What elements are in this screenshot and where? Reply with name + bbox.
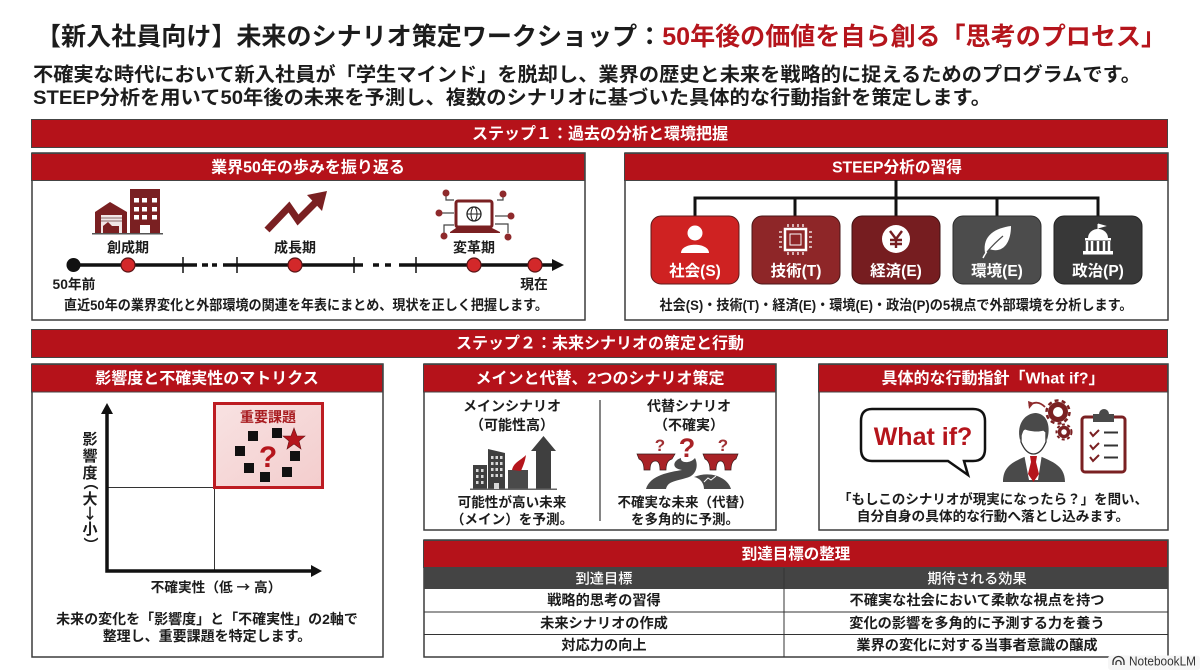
panel header: STEEP: STEEP分析の習得	[832, 158, 962, 176]
panel: two scenarios	[424, 364, 776, 530]
card: economy: 経済(E)	[870, 262, 922, 280]
panel header: history	[32, 154, 584, 180]
panel header: goals: 到達目標の整理	[742, 544, 851, 563]
panel header: goals	[424, 540, 1168, 568]
y axis label: 影	[82, 430, 98, 448]
NotebookLM watermark: NotebookLM	[1129, 654, 1196, 668]
main scenario caption	[451, 494, 573, 527]
main scenario heading	[463, 398, 561, 433]
table row 1: 不確実な社会において柔軟な視点を持つ	[850, 592, 1104, 609]
table row 1: 戦略的思考の習得	[547, 592, 661, 609]
card: society	[651, 216, 739, 284]
speech bubble	[861, 409, 985, 475]
y axis label: ）	[82, 537, 98, 552]
table row 3: 業界の変化に対する当事者意識の醸成	[856, 637, 1098, 654]
table row 3	[561, 637, 1098, 654]
matrix axes	[101, 403, 322, 577]
icon: clipboard checklist	[1082, 409, 1125, 472]
alternative scenario heading	[647, 398, 731, 433]
matrix caption: 整理し、重要課題を特定します。	[103, 628, 311, 644]
alternative scenario heading: （不確実）	[654, 417, 724, 433]
timeline labels: 現在	[520, 276, 548, 292]
card: politics: 政治(P)	[1072, 261, 1124, 280]
card: economy	[852, 216, 940, 284]
history caption: 直近50年の業界変化と外部環境の関連を年表にまとめ、現状を正しく把握します。	[64, 297, 548, 313]
timeline	[66, 257, 564, 273]
timeline labels: 創成期	[107, 240, 149, 256]
divider	[599, 400, 601, 521]
highlighted quadrant: key issues	[214, 404, 322, 488]
icon: broken bridges and forked road	[637, 433, 738, 489]
matrix caption	[56, 611, 358, 644]
alternative scenario caption	[618, 494, 752, 527]
step 1 banner: ステップ１：過去の分析と環境把握	[472, 124, 728, 143]
main scenario heading: メインシナリオ	[463, 398, 561, 414]
card: politics	[1054, 216, 1142, 284]
timeline labels: 成長期	[274, 240, 316, 256]
table header row: 到達目標	[576, 572, 632, 588]
main scenario caption: （メイン）を予測。	[451, 511, 573, 527]
table row 2	[540, 615, 1105, 632]
icon: curved arrow and gears	[1028, 400, 1072, 440]
table header row: 期待される効果	[927, 572, 1027, 588]
y axis label: 小	[82, 521, 98, 538]
panel header: matrix	[32, 364, 382, 392]
panel header: scenarios	[424, 364, 776, 392]
highlighted quadrant: key issues: 重要課題	[240, 409, 296, 425]
table row 2: 変化の影響を多角的に予測する力を養う	[849, 615, 1105, 632]
table grid lines	[424, 568, 1168, 657]
panel header: what if: 具体的な行動指針「What if?」	[881, 370, 1105, 388]
what if caption	[838, 491, 1148, 524]
card: technology	[752, 216, 840, 284]
highlighted quadrant: key issues: ?	[259, 441, 277, 474]
card: society: 社会(S)	[669, 262, 721, 280]
what if caption: 「もしこのシナリオが現実になったら？」を問い、	[838, 491, 1148, 507]
intro text: STEEP分析を用いて50年後の未来を予測し、複数のシナリオに基づいた具体的な行動指針を策定します。	[33, 86, 991, 109]
matrix grid lines	[107, 487, 214, 571]
table row 2: 未来シナリオの作成	[540, 615, 668, 632]
panel header: STEEP	[624, 154, 1168, 180]
panel: STEEP analysis	[624, 153, 1168, 320]
matrix caption: 未来の変化を「影響度」と「不確実性」の2軸で	[56, 611, 358, 627]
panel: industry 50 year history	[32, 153, 585, 320]
timeline labels: 変革期	[453, 240, 495, 256]
step 2 banner	[32, 330, 1168, 358]
card: environment: 環境(E)	[971, 262, 1023, 280]
panel header: what if	[818, 364, 1168, 392]
y axis label	[82, 430, 98, 552]
panel header: scenarios: メインと代替、2つのシナリオ策定	[476, 368, 724, 388]
card: environment	[953, 216, 1041, 284]
panel header: history: 業界50年の歩みを振り返る	[211, 158, 405, 176]
NotebookLM watermark	[1108, 654, 1200, 670]
STEEP caption: 社会(S)・技術(T)・経済(E)・環境(E)・政治(P)の5視点で外部環境を分析します。	[660, 297, 1132, 313]
what if caption: 自分自身の具体的な行動へ落とし込みます。	[857, 508, 1129, 524]
table header row	[424, 568, 1168, 589]
y axis label: 響	[82, 447, 98, 465]
y axis label: （	[82, 475, 98, 490]
icon: factory and office building	[92, 189, 163, 234]
table row 1	[547, 592, 1104, 609]
step 1 banner	[32, 120, 1168, 148]
panel: what if action guide	[818, 364, 1168, 530]
speech bubble: What if?	[874, 423, 972, 451]
panel header: matrix: 影響度と不確実性のマトリクス	[95, 368, 319, 388]
x axis label: 不確実性（低 → 高）	[151, 576, 281, 596]
icon: broken bridges and forked road: ?	[679, 433, 695, 463]
title: 【新入社員向け】未来のシナリオ策定ワークショップ：50年後の価値を自ら創る「思考のプロセス」	[36, 23, 1166, 51]
alternative scenario caption: 不確実な未来（代替）	[618, 494, 752, 510]
panel: goals table	[424, 540, 1168, 657]
table row 3: 対応力の向上	[561, 637, 647, 654]
y axis label: ↓	[82, 503, 98, 524]
icon: city with up arrow	[470, 436, 557, 490]
y axis label: 度	[82, 464, 98, 482]
card: technology: 技術(T)	[771, 261, 821, 280]
alternative scenario heading: 代替シナリオ	[647, 398, 731, 414]
intro text	[33, 63, 1141, 109]
alternative scenario caption: を多角的に予測。	[631, 511, 739, 527]
panel: impact and uncertainty matrix	[32, 364, 383, 657]
main scenario heading: （可能性高）	[470, 417, 554, 433]
icon: broken bridges and forked road: ?	[655, 436, 665, 455]
tree connector	[695, 180, 1098, 216]
step 2 banner: ステップ２：未来シナリオの策定と行動	[456, 334, 744, 352]
intro text: 不確実な時代において新入社員が「学生マインド」を脱却し、業界の歴史と未来を戦略的に捉えるためのプログラムです。	[33, 63, 1141, 86]
main scenario caption: 可能性が高い未来	[458, 494, 567, 510]
icon: growth arrow	[267, 191, 327, 230]
icon: digital laptop	[436, 190, 514, 240]
icon: businessperson thinking	[1003, 413, 1065, 482]
icon: broken bridges and forked road: ?	[718, 436, 728, 455]
timeline labels: 50年前	[53, 276, 96, 292]
y axis label: 大	[82, 490, 98, 508]
timeline labels	[53, 240, 548, 292]
